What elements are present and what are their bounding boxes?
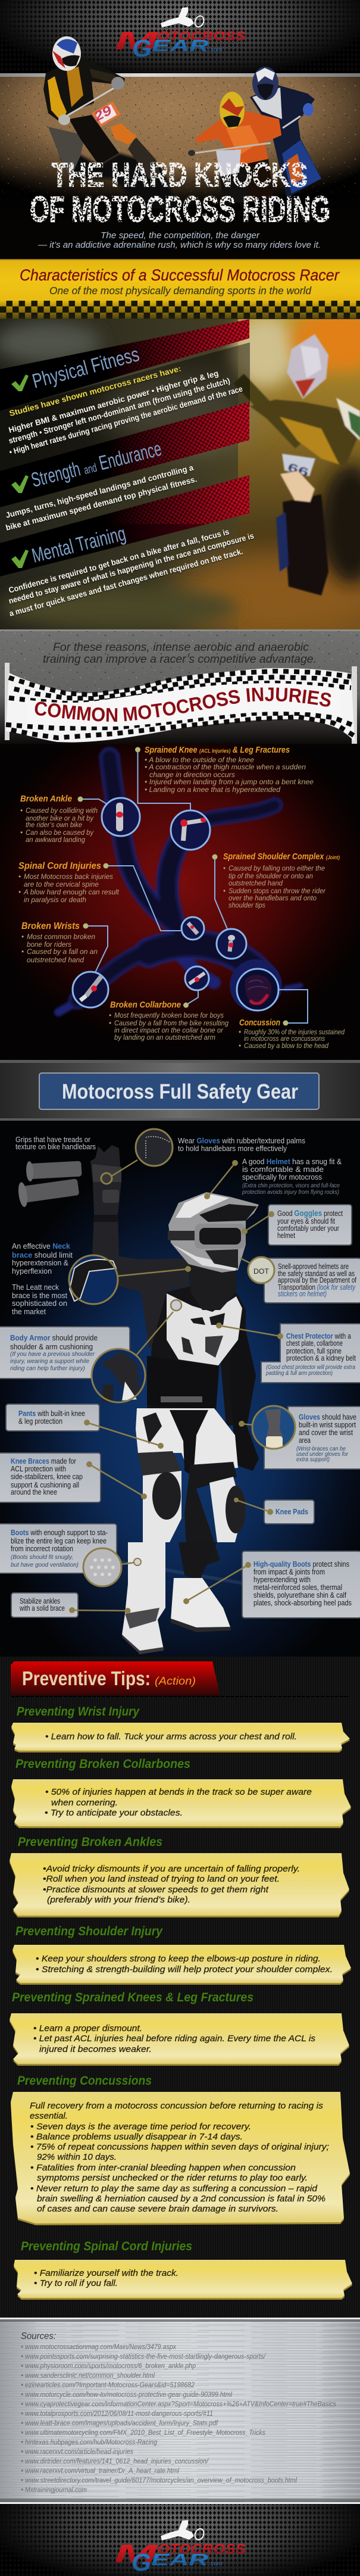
text block: source list: • bbox=[21, 2428, 23, 2437]
text block: broken ankle: an awkward landing bbox=[26, 837, 86, 844]
panel: knee braces callout: support & cushioning all bbox=[11, 1481, 79, 1489]
panel: dot approval callout: DOT bbox=[253, 1267, 270, 1275]
text block: source list: • bbox=[21, 2400, 23, 2408]
icon: checkered flag banner bbox=[5, 663, 357, 744]
text block: broken wrists: Most common broken bbox=[27, 934, 95, 941]
text block: mental details: Confidence is required to get back on a bike after a fall, focus is bbox=[8, 527, 230, 595]
heading: preventive tips: Preventive Tips: bbox=[22, 1667, 151, 1689]
icon: logo: OTOCROSS bbox=[158, 29, 246, 43]
text block: source list: • bbox=[21, 2447, 23, 2456]
icon: footer logo: OTOCROSS bbox=[158, 2541, 246, 2556]
text block: broken wrists: • bbox=[21, 934, 24, 941]
icon: logo: .com bbox=[209, 46, 223, 52]
text block: source list: • bbox=[21, 2409, 23, 2418]
panel: body armor callout: Body Armor should provide bbox=[10, 1334, 98, 1342]
icon: wrist circle bbox=[73, 972, 108, 1008]
panel: wrist gloves callout: used under gloves for bbox=[296, 1451, 349, 1458]
panel: ankle tips bbox=[10, 1853, 349, 1916]
panel: knee braces callout bbox=[0, 1453, 147, 1502]
panel: preventive tips background bbox=[0, 1657, 360, 2318]
text block: spinal cord injuries: Spinal Cord Injuries bbox=[18, 861, 101, 871]
text block: sprained shoulder: over the handlebars and onto bbox=[228, 895, 317, 902]
text block: sprained shoulder: • bbox=[223, 888, 226, 895]
text block: broken collarbone: in direct impact on the collar bone or bbox=[114, 1027, 224, 1034]
text block: broken wrists: Caused by a fall on an bbox=[27, 949, 98, 956]
text block: broken ankle: • bbox=[20, 807, 23, 815]
heading: broken collarbones: Preventing Broken Collarbones bbox=[15, 1757, 190, 1771]
text block: sprained shoulder: Caused by falling onto either the bbox=[228, 865, 325, 872]
heading: sources: Sources: bbox=[21, 2331, 56, 2341]
panel: racer photo backdrop bbox=[0, 301, 360, 629]
panel: knee braces callout: ACL protection with bbox=[11, 1465, 66, 1473]
text block: broken ankle: the rider’s own bike bbox=[26, 822, 82, 829]
text block: sprained shoulder: Sprained Shoulder Complex (Joint) bbox=[223, 852, 340, 862]
panel: high quality boots callout: shields, polyurethane shin & calf bbox=[253, 1591, 346, 1599]
icon: footer logo bbox=[114, 2520, 246, 2576]
panel: dot approval callout bbox=[240, 1257, 360, 1303]
text block: concussion: Caused by a blow to the head bbox=[244, 1043, 329, 1050]
text block: source list: • bbox=[21, 2419, 23, 2427]
text block: source list: www.motocrossactionmag.com/Main/News/3479.aspx bbox=[25, 2343, 177, 2351]
text block: sprained knee: • A blow to the outside of the knee bbox=[145, 757, 254, 764]
panel: characteristics heading: Characteristics of a Successful Motocross Racer bbox=[20, 266, 340, 284]
panel: ankle brace callout: Stabilize ankles bbox=[20, 1597, 60, 1605]
text block: source list: • bbox=[21, 2466, 23, 2475]
panel: concussion tips: essential. bbox=[30, 2111, 68, 2121]
panel: header mesh bbox=[0, 0, 360, 77]
panel: racer photo warm side bbox=[238, 319, 360, 629]
text block: source list: www.sandersclinic.net/common_shoulder.html bbox=[25, 2371, 155, 2379]
text block: sprained shoulder: Sudden stops can throw the rider bbox=[228, 888, 326, 895]
text block: subtitle: The speed, the competition, the danger bbox=[101, 230, 260, 241]
panel: shoulder tips: • Keep your shoulders strong to keep the elbows-up posture in riding. bbox=[36, 1954, 321, 1964]
heading: mental training: Mental Training bbox=[30, 522, 128, 567]
text block: training note bbox=[43, 641, 317, 666]
icon: footer logo: G bbox=[132, 2549, 151, 2576]
panel: boots support callout: (Boots should fit snugly, bbox=[11, 1554, 73, 1561]
text block: handlebar grips: Grips that have treads or bbox=[15, 1136, 90, 1144]
panel: shoulder tips bbox=[12, 1945, 351, 1983]
text block: source list: • bbox=[21, 2457, 23, 2465]
panel: high quality boots callout: hyperextending with bbox=[253, 1576, 311, 1584]
text block: broken wrists bbox=[21, 921, 98, 964]
panel: concussion tips: • Fatalities from inter-cranial bleeding happen when concussion bbox=[30, 2163, 296, 2173]
text block: mental details: a must for quick saves and fast changes when required on the track. bbox=[8, 547, 244, 618]
panel: injuries background bbox=[0, 629, 360, 1060]
icon: logo: G bbox=[132, 35, 152, 62]
icon: rider in blue bbox=[250, 67, 321, 198]
icon: logo bbox=[115, 7, 246, 62]
heading: sprained knees: Preventing Sprained Knees & Leg Fractures bbox=[12, 1991, 253, 2004]
text block: neck brace: the market bbox=[12, 1308, 46, 1316]
panel: high quality boots callout: from impact & joints from bbox=[253, 1568, 325, 1576]
text block: strength details: Jumps, turns, high-speed landings and controlling a bbox=[5, 463, 195, 520]
panel: safety gear heading: Motocross Full Safety Gear bbox=[62, 1080, 298, 1103]
arrow: spinal leader bbox=[104, 863, 183, 931]
panel: ankle brace callout: with a solid brace bbox=[19, 1604, 65, 1613]
icon: logo: EAR bbox=[152, 36, 209, 55]
panel: body armor callout: shoulder & arm cushioning bbox=[10, 1343, 93, 1351]
panel: wrist tips bbox=[11, 1723, 350, 1751]
arrow: shoulder leader bbox=[212, 854, 227, 929]
text block: sprained shoulder: tip of the shoulder or onto an bbox=[228, 873, 313, 880]
icon: rider in full gear bbox=[122, 1192, 259, 1654]
icon: handlebar grips bbox=[17, 1159, 82, 1208]
panel: concussion tips: symptoms persist unchecked or the rider returns to play too early. bbox=[37, 2173, 308, 2183]
text block: strength details: bike at maximum speed demand top physical fitness. bbox=[5, 475, 198, 532]
panel: knee pads callout: Knee Pads bbox=[276, 1508, 308, 1516]
text block: broken wrists: bone for riders bbox=[27, 941, 71, 949]
panel: knee tips: • Learn a proper dismount. bbox=[33, 2023, 142, 2034]
text block: concussion: Roughly 30% of the injuries sustained bbox=[244, 1029, 345, 1036]
icon: shoulder circle bbox=[217, 929, 246, 959]
panel: boots support callout: from incorrect rotation bbox=[11, 1545, 73, 1553]
panel: pants callout: Pants with built-in knee bbox=[18, 1409, 85, 1418]
text block: source list: ezinearticles.com/?Important-Motocross-Gears&id=5198682 bbox=[25, 2381, 195, 2389]
text block: helmet: specifically for motocross bbox=[242, 1173, 322, 1181]
text block: source list: • bbox=[21, 2485, 23, 2494]
panel: knee braces callout: Knee Braces made for bbox=[11, 1457, 76, 1465]
panel: spinal tips bbox=[14, 2260, 352, 2298]
text block: concussion bbox=[239, 1018, 345, 1050]
text block: broken collarbone bbox=[109, 1000, 229, 1041]
panel: sources bbox=[0, 2318, 360, 2502]
text block: neck brace: sophisticated on bbox=[12, 1299, 67, 1308]
icon: knee circle bbox=[171, 810, 210, 850]
text block: neck brace: The Leatt neck bbox=[12, 1283, 60, 1292]
text block: source list: hintexas.hubpages.com/hub/Motocross-Racing bbox=[25, 2438, 157, 2446]
panel: knee tips bbox=[10, 2013, 349, 2064]
panel: physical fitness banner bbox=[0, 319, 250, 473]
panel: wrist gloves callout: extra support) bbox=[296, 1457, 330, 1463]
arrow: concussion leader bbox=[279, 990, 308, 1025]
panel: ankle brace callout bbox=[11, 1593, 131, 1617]
panel: goggles callout bbox=[242, 1205, 352, 1245]
panel: goggles callout: comfortably under your bbox=[277, 1224, 339, 1233]
panel: hero dirt track bbox=[0, 77, 360, 259]
icon: falling body silhouette bbox=[58, 757, 300, 1012]
icon: rider number 29 bbox=[43, 36, 179, 208]
text block: sprained shoulder bbox=[223, 852, 340, 909]
panel: ankle tips: •Avoid tricky dismounts if you are uncertain of falling properly. bbox=[43, 1864, 300, 1874]
text block: helmet bbox=[242, 1158, 342, 1196]
panel: pants callout: & leg protection bbox=[18, 1417, 62, 1426]
panel: goggles callout: helmet bbox=[277, 1231, 295, 1240]
panel: chest protector callout: Chest Protector with a bbox=[286, 1332, 351, 1340]
text block: spinal cord injuries: in paralysis or death bbox=[24, 897, 86, 904]
panel: high quality boots callout bbox=[183, 1551, 360, 1618]
text block: sprained knee: • A contraction of the thigh muscle when a sudden bbox=[145, 764, 306, 771]
text block: sprained knee: • Injured when landing from a jump onto a bent knee bbox=[145, 779, 314, 786]
text block: source list: Mxtrainingjournal.com bbox=[25, 2485, 87, 2494]
heading: broken ankles: Preventing Broken Ankles bbox=[18, 1835, 162, 1849]
panel: mental banner bbox=[0, 475, 249, 576]
panel: knee tips: injured it becomes weaker. bbox=[39, 2044, 152, 2054]
text block: broken ankle: Can also be caused by bbox=[26, 829, 94, 837]
icon: logo: M bbox=[115, 27, 159, 55]
icon: footer logo: .com bbox=[209, 2561, 223, 2566]
panel: concussion tips: brain swelling & herniation caused by a 2nd concussion is fatal in 50% bbox=[37, 2194, 325, 2204]
text block: handlebar grips: texture on bike handlebars bbox=[15, 1143, 96, 1151]
text block: broken ankle: Broken Ankle bbox=[20, 794, 72, 804]
panel: wrist gloves callout: (Wrist-braces can be bbox=[296, 1446, 346, 1452]
icon: footer logo: M bbox=[114, 2540, 158, 2568]
panel: concussion tips: of cases and can cause severe brain damage in survivors. bbox=[37, 2204, 278, 2214]
text block: broken ankle bbox=[20, 794, 98, 844]
panel: collarbone tips: • Try to anticipate your obstacles. bbox=[45, 1808, 183, 1818]
text block: source list: • bbox=[21, 2352, 23, 2360]
text block: source list: • bbox=[21, 2438, 23, 2446]
text block: concussion: in motocross are concussions bbox=[244, 1036, 325, 1043]
panel: pants callout bbox=[6, 1404, 164, 1449]
text block: gloves grip: Wear Gloves with rubber/textured palms bbox=[178, 1137, 305, 1145]
panel: body armor callout bbox=[0, 1327, 130, 1379]
text block: handlebar grips bbox=[15, 1136, 96, 1151]
text block: helmet: A good Helmet has a snug fit & bbox=[242, 1158, 342, 1166]
text block: source list: www.dirtrider.com/features/141_0612_head_injuries_concussion/ bbox=[25, 2457, 209, 2465]
text block: gloves grip bbox=[178, 1137, 305, 1153]
panel: goggles callout: your eyes & should fit bbox=[277, 1217, 335, 1225]
text block: physical fitness details: strength • Stronger left non-dominant arm (from using the clutch) bbox=[8, 376, 231, 445]
text block: source list: www.racerxvt.com/virtual_trainer/Dr_A_heart_rate.html bbox=[25, 2466, 179, 2475]
text block: sprained shoulder: • bbox=[223, 865, 226, 872]
panel: concussion tips: • Seven days is the average time period for recovery. bbox=[30, 2122, 251, 2132]
text block: spinal cord injuries: Most Motocross back injuries bbox=[24, 874, 113, 881]
panel: collarbone tips bbox=[11, 1779, 351, 1826]
text block: spinal cord injuries: are to the cervical spine bbox=[24, 881, 99, 888]
panel: concussion tips: Full recovery from a motocross concussion before returning to racing is bbox=[30, 2101, 324, 2111]
text block: spinal cord injuries: A blow hard enough can result bbox=[23, 889, 120, 896]
icon: check mark bbox=[11, 375, 29, 391]
text block: source list: • bbox=[21, 2343, 23, 2351]
panel: chest protector callout: protection, full spine bbox=[286, 1347, 342, 1355]
icon: brain circle bbox=[237, 969, 278, 1011]
panel: high quality boots callout: metal-reinforced soles, thermal bbox=[253, 1583, 342, 1592]
heading: spinal cord injuries: Preventing Spinal Cord Injuries bbox=[21, 2240, 192, 2253]
arrow: helmet leader bbox=[208, 1160, 238, 1196]
text block: training note: For these reasons, intense aerobic and anaerobic bbox=[53, 641, 309, 654]
text block: sprained knee: • Landing on a knee that is hyperextended bbox=[145, 787, 281, 794]
panel: wrist tips: • Learn how to fall. Tuck your arms across your chest and roll. bbox=[45, 1732, 297, 1742]
panel: concussion tips: 92% within 10 days. bbox=[37, 2152, 117, 2162]
text block: source list: www.streetdirectory.com/travel_guide/60177/motorcycles/an_overview_of_motocross_boots.html bbox=[25, 2476, 297, 2484]
text block: source list bbox=[21, 2343, 336, 2494]
heading: concussions: Preventing Concussions bbox=[17, 2074, 152, 2088]
icon: rider in orange bbox=[188, 92, 281, 202]
text block: physical fitness details: Higher BMI & maximum aerobic power • Higher grip & leg bbox=[8, 369, 220, 435]
panel: goggles callout: Good Goggles protect bbox=[277, 1208, 343, 1218]
text block: source list: • bbox=[21, 2476, 23, 2484]
heading: physical fitness: Physical Fitness bbox=[30, 343, 142, 393]
icon: broken ankle circle bbox=[102, 798, 140, 836]
panel: strength banner bbox=[0, 402, 249, 507]
panel: footer mesh bbox=[0, 2502, 360, 2576]
panel: chest protector callout bbox=[216, 1323, 360, 1383]
text block: concussion: • bbox=[239, 1029, 241, 1036]
panel: characteristics heading: One of the most physically demanding sports in the world bbox=[49, 285, 312, 297]
text block: sprained knee: change in direction occurs bbox=[149, 772, 235, 779]
panel: boots support callout: but have good ventilation) bbox=[11, 1562, 79, 1568]
text block: broken ankle: Caused by colliding with bbox=[26, 807, 98, 815]
panel: collarbone tips: • 50% of injuries happen at bends in the track so be super aware bbox=[45, 1787, 312, 1797]
text block: source list: www.ultimatemotorcycling.com/FMX_2010_Best_List_of_Freestyle_Motocross_Tricks bbox=[25, 2428, 265, 2437]
text block: broken collarbone: • bbox=[109, 1020, 111, 1027]
text block: helmet: protection avoids injury from flying rocks) bbox=[242, 1189, 339, 1196]
heading: strength and endurance: Strength and Endurance bbox=[29, 438, 164, 492]
panel: knee braces callout: side-stabilizers, knee cap bbox=[11, 1473, 83, 1481]
text block: sprained shoulder: outstretched hand bbox=[228, 880, 283, 887]
panel: ankle tips: •Roll when you land instead of trying to land on your feet. bbox=[43, 1874, 280, 1884]
text block: mental details: needed to stay aware of what is happening in the race and composure is bbox=[8, 531, 255, 606]
text block: neck brace: brace is the most bbox=[12, 1292, 68, 1300]
arrow: collarbone leader bbox=[183, 990, 198, 1008]
text block: source list: www.racerxvt.com/article/head-injuries bbox=[25, 2447, 133, 2456]
text block: neck brace bbox=[12, 1242, 73, 1316]
panel: concussion tips: • Balance problems usually disappear in 7-14 days. bbox=[30, 2132, 243, 2142]
heading: preventive tips: (Action) bbox=[155, 1675, 196, 1687]
panel: safety gear heading bbox=[0, 1060, 360, 1121]
panel: spinal tips: • Try to roll if you fall. bbox=[34, 2278, 118, 2288]
text block: source list: www.motorcycle.com/how-to/motocross-protective-gear-guide-90399.html bbox=[25, 2390, 232, 2399]
icon: neck brace detail bbox=[69, 1255, 191, 1304]
text block: neck brace: hyperextension & bbox=[12, 1259, 69, 1267]
arrow: wrist leader bbox=[83, 923, 108, 972]
panel: hero dirt speckle and fade bbox=[0, 77, 360, 259]
panel: racer photo: 66 bbox=[286, 461, 310, 480]
panel: wrist gloves callout: and cover the wrist bbox=[299, 1429, 353, 1437]
text block: broken collarbone: by landing on an outstretched arm bbox=[114, 1034, 215, 1041]
panel: dot approval callout: stickers on helmet) bbox=[278, 1290, 327, 1298]
text block: source list: • bbox=[21, 2362, 23, 2370]
heading: shoulder injury: Preventing Shoulder Injury bbox=[15, 1925, 163, 1938]
heading: wrist injury: Preventing Wrist Injury bbox=[17, 1705, 140, 1719]
title bbox=[30, 156, 330, 229]
panel: high quality boots callout: High-quality Boots protect shins bbox=[253, 1560, 349, 1568]
text block: neck brace: brace should limit bbox=[12, 1251, 73, 1259]
text block: helmet: (Extra chin protection, visors and full-face bbox=[242, 1183, 340, 1189]
text block: neck brace: An effective Neck bbox=[12, 1242, 70, 1250]
text block: sprained knee: Sprained Knee (ACL Injuries) & Leg Fractures bbox=[145, 745, 290, 755]
arrow: ankle leader bbox=[77, 797, 108, 804]
icon: rider number 29: 29 bbox=[91, 102, 115, 124]
text block: broken collarbone: • bbox=[109, 1012, 111, 1019]
text block: source list: www.leatt-brace.com/images/uploads/accident_form/Injury_Stats.pdf bbox=[25, 2419, 218, 2427]
panel: chest protector callout: chest plate, collarbone bbox=[286, 1339, 343, 1348]
text block: spinal cord injuries: • bbox=[18, 874, 21, 881]
text block: source list: • bbox=[21, 2390, 23, 2399]
panel: racer photo bbox=[0, 301, 360, 637]
text block: source list: • bbox=[21, 2371, 23, 2379]
text block: concussion: Concussion bbox=[239, 1018, 280, 1028]
panel: concussion tips: • Never return to play the same day as suffering a concussion – rapid bbox=[30, 2184, 318, 2194]
icon: check mark bbox=[11, 475, 29, 493]
panel: spinal tips: • Familiarize yourself with the track. bbox=[34, 2268, 179, 2278]
icon: check mark bbox=[11, 550, 29, 568]
panel: wrist gloves callout bbox=[239, 1406, 360, 1469]
panel: boots support callout: Boots with enough support to sta- bbox=[11, 1529, 108, 1537]
panel: shoulder tips: • Stretching & strength-building will help protect your shoulder complex. bbox=[36, 1964, 333, 1975]
text block: broken collarbone: Caused by a fall from the bike resulting bbox=[114, 1020, 229, 1027]
text block: spinal cord injuries bbox=[18, 861, 120, 904]
panel: concussion tips: • 75% of repeat concussions happen within seven days of original injury; bbox=[30, 2142, 329, 2152]
panel: knee pads callout bbox=[234, 1498, 314, 1524]
text block: broken wrists: Broken Wrists bbox=[21, 921, 80, 931]
panel: concussion tips bbox=[11, 2092, 350, 2223]
arrow: sprained knee leader bbox=[135, 747, 190, 811]
text block: subtitle bbox=[37, 230, 321, 250]
panel: knee braces callout: around the knee bbox=[11, 1488, 57, 1496]
heading: preventive tips bbox=[11, 1661, 350, 1696]
panel: body armor callout: injury, wearing a support while bbox=[10, 1358, 89, 1365]
text block: source list: www.physioroom.com/sports/motocross/6_broken_ankle.php bbox=[25, 2362, 196, 2370]
icon: glove palm detail bbox=[111, 1129, 173, 1177]
panel: ankle tips: (preferably with your friend’s bike). bbox=[47, 1895, 190, 1905]
text block: neck brace: hyperflexion bbox=[12, 1267, 52, 1275]
panel: safety gear background bbox=[0, 1121, 360, 1657]
text block: sprained knee bbox=[145, 745, 314, 794]
panel: wrist gloves callout: area bbox=[299, 1436, 311, 1445]
text block: concussion: • bbox=[239, 1043, 241, 1050]
icon: body armor detail bbox=[92, 1300, 181, 1402]
panel: collarbone tips: when cornering. bbox=[51, 1798, 118, 1808]
text block: physical fitness details: • High heart rates during racing proving the aerobic demand of the race bbox=[8, 384, 244, 457]
text block: subtitle: — it’s an addictive adrenaline rush, which is why so many riders love it. bbox=[37, 240, 321, 250]
text block: physical fitness details: Studies have shown motocross racers have: bbox=[8, 364, 182, 418]
text block: source list: • bbox=[21, 2381, 23, 2389]
panel: knee tips: • Let past ACL injuries heal before riding again. Every time the ACL is bbox=[33, 2034, 316, 2044]
icon: raised glove and arm bbox=[90, 1145, 189, 1348]
text block: broken collarbone: Most frequently broken bone for boys bbox=[114, 1012, 224, 1019]
panel: ankle tips: •Practice dismounts at slower speeds to get them right bbox=[43, 1885, 269, 1895]
text block: spinal cord injuries: • bbox=[18, 889, 21, 896]
icon: collarbone circle bbox=[185, 966, 209, 990]
heading: common motocross injuries: COMMON MOTOCROSS INJURIES bbox=[35, 687, 331, 722]
text block: broken wrists: • bbox=[21, 949, 24, 956]
text block: broken ankle: another bike or a hit by bbox=[26, 815, 94, 822]
panel: chest protector callout: padding & full arm protection) bbox=[265, 1370, 333, 1377]
text block: gloves grip: to hold handlebars more effectively bbox=[178, 1144, 287, 1153]
panel: boots support callout: blize the entire leg can keep knee bbox=[11, 1537, 107, 1545]
text block: broken collarbone: Broken Collarbone bbox=[110, 1000, 181, 1010]
panel: body armor callout: (If you have a previous shoulder bbox=[10, 1351, 95, 1358]
panel: characteristics heading bbox=[0, 259, 360, 301]
text block: helmet: is comfortable & made bbox=[242, 1165, 324, 1174]
panel: body armor callout: riding can help further injury) bbox=[10, 1365, 85, 1372]
text block: source list: www.totalprosports.com/2012/06/08/11-most-dangerous-sports/#11 bbox=[25, 2409, 213, 2418]
icon: footer logo: EAR bbox=[151, 2550, 209, 2569]
text block: broken ankle: • bbox=[20, 829, 23, 837]
text block: source list: www.pointssports.com/surprising-statistics-the-five-most-startlingly-dangerous-sports/ bbox=[25, 2352, 266, 2360]
text block: sprained shoulder: shoulder tips bbox=[228, 902, 265, 909]
icon: spine circle bbox=[181, 917, 204, 940]
panel: boots support callout bbox=[0, 1524, 141, 1586]
text block: training note: training can improve a racer’s competitive advantage. bbox=[43, 653, 317, 666]
text block: broken wrists: outstretched hand bbox=[27, 957, 84, 964]
